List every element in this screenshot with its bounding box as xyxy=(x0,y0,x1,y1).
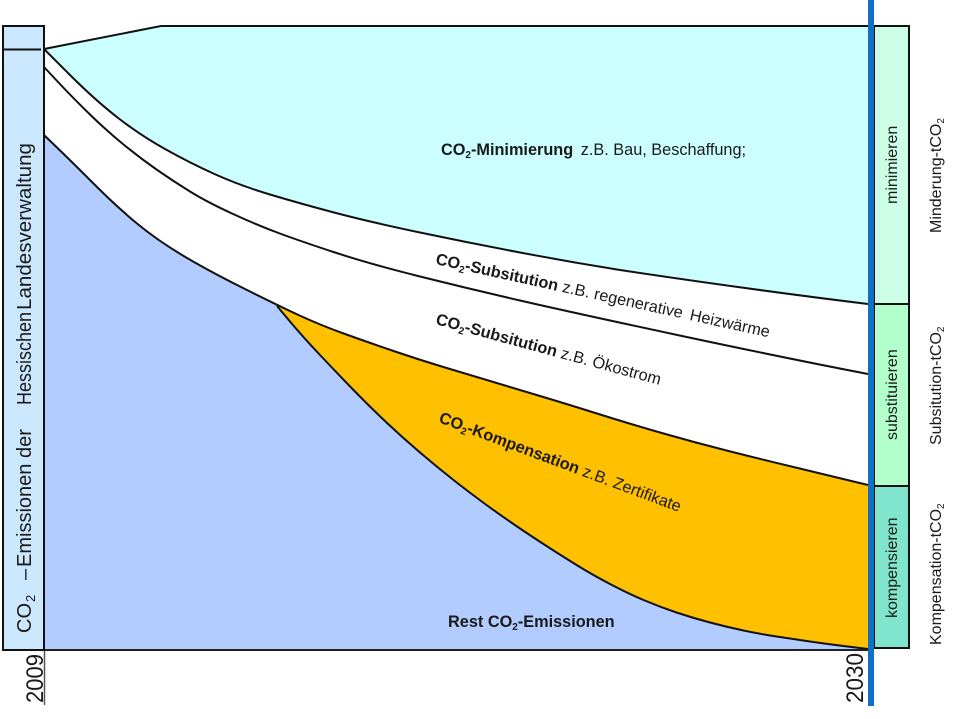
label: minimization: z.B. Bau, Beschaffung; xyxy=(581,141,746,159)
left bar label: Landesverwaltung xyxy=(14,143,36,310)
label: kompensieren: kompensieren xyxy=(884,518,901,618)
text: substitution tCO2: Subsitution-tCO xyxy=(928,332,945,445)
label: substitution electricity: 2 xyxy=(457,326,466,338)
year: 2009: 2009 xyxy=(22,654,49,703)
year: 2030: 2030 xyxy=(842,653,869,703)
label: remaining emissions: -Emissionen xyxy=(518,613,615,631)
label: substitution heat: z.B. regenerative Heizwärme xyxy=(561,278,772,341)
left bar label: der xyxy=(14,429,36,458)
area: compensation band xyxy=(44,135,868,650)
left bar: emissions xyxy=(3,26,44,650)
label: substituieren: substituieren xyxy=(884,349,901,440)
left bar label xyxy=(14,143,38,633)
right bar: minimize xyxy=(874,26,909,304)
left bar label: – xyxy=(14,568,36,580)
label: substitution electricity: CO xyxy=(433,310,559,363)
right bar: compensate xyxy=(874,486,909,648)
label: compensation: -Kompensation xyxy=(465,419,582,478)
curve: upper edge of compensation band xyxy=(44,135,868,485)
area: minimization band xyxy=(44,26,868,304)
text: compensation tCO2: 2 xyxy=(936,503,947,509)
text: compensation tCO2: Kompensation-tCO xyxy=(928,509,945,645)
area: remaining CO2 emissions xyxy=(44,135,868,650)
label: remaining emissions: 2 xyxy=(512,622,518,633)
right bar: substitute xyxy=(874,304,909,486)
label: minimization: CO xyxy=(441,141,573,161)
label: compensation: z.B. Zertifikate xyxy=(580,462,684,516)
text: substitution tCO2: 2 xyxy=(936,326,947,332)
left bar label: Hessischen xyxy=(14,312,36,405)
text: reduction tCO2: Minderung-tCO xyxy=(928,124,945,233)
label: remaining emissions: Rest CO xyxy=(448,613,512,631)
label: substitution electricity: z.B. Ökostrom xyxy=(559,344,663,389)
label: compensation: 2 xyxy=(459,426,468,438)
label: substitution heat: 2 xyxy=(458,264,466,276)
left bar label: Emissionen xyxy=(14,464,36,567)
label: minimization: -Minimierung xyxy=(471,141,573,159)
axis line: baseline xyxy=(3,649,868,651)
text: reduction tCO2: 2 xyxy=(936,118,947,124)
blue vertical line: target year 2030 xyxy=(868,0,874,706)
curve: lower edge of compensation band xyxy=(277,306,868,649)
left bar label: 2 xyxy=(23,595,38,602)
label: minimization: 2 xyxy=(465,150,471,161)
axis tick: 2009 xyxy=(44,650,46,705)
label: minimieren: minimieren xyxy=(884,126,901,204)
label: substitution electricity: -Subsitution xyxy=(463,318,559,361)
curve: substitution divider xyxy=(44,67,868,374)
label: substitution heat: -Subsitution xyxy=(463,257,560,295)
label: substitution heat: CO xyxy=(434,250,560,297)
label: compensation: CO xyxy=(436,409,582,480)
left bar label: CO xyxy=(14,603,36,633)
